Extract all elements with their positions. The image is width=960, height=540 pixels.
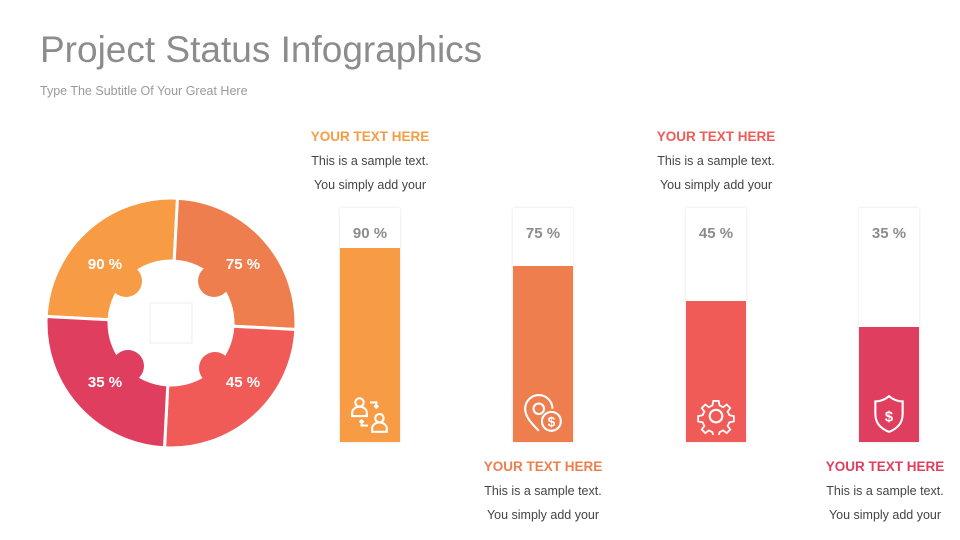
text block 4: This is a sample text. [826,484,944,498]
text block 2: YOUR TEXT HERE [484,459,602,474]
bar 45% [686,208,746,442]
segment 45%: 45 % [226,374,260,391]
segment 90%: 90 % [88,256,122,273]
text block 2: You simply add your [487,508,599,522]
segment 75%: 75 % [226,256,260,273]
bar 75% [513,208,573,442]
segment 35%: 35 % [88,374,122,391]
text block 4 [826,459,944,522]
icon: shield dollar: $ [885,409,893,425]
icon: location money [524,394,562,432]
icon: location money: $ [548,415,556,430]
text block 3 [657,129,775,192]
bar 75%: 75 % [526,225,560,242]
bar 90%: 90 % [353,225,387,242]
text block 4: YOUR TEXT HERE [826,459,944,474]
segment 90% [46,198,178,320]
text block 4: You simply add your [829,508,941,522]
bar 35%: 35 % [872,225,906,242]
subtitle: Type The Subtitle Of Your Great Here [40,84,248,98]
bar 35% [859,208,919,442]
text block 1: YOUR TEXT HERE [311,129,429,144]
segment 45% [164,326,296,448]
text block 3: YOUR TEXT HERE [657,129,775,144]
segment 75% [174,198,296,330]
bar 90% [340,208,400,442]
icon: shield dollar [874,394,904,433]
text block 1 [311,129,429,192]
text block 2: This is a sample text. [484,484,602,498]
icon: people exchange [351,397,388,433]
text block 2 [484,459,602,522]
title: Project Status Infographics [40,29,482,70]
donut chart [48,200,295,446]
text block 1: You simply add your [314,178,426,192]
segment 35% [46,316,168,448]
text block 3: You simply add your [660,178,772,192]
text block 1: This is a sample text. [311,154,429,168]
icon: gear [697,400,735,435]
text block 3: This is a sample text. [657,154,775,168]
center box [150,303,192,343]
bar 45%: 45 % [699,225,733,242]
